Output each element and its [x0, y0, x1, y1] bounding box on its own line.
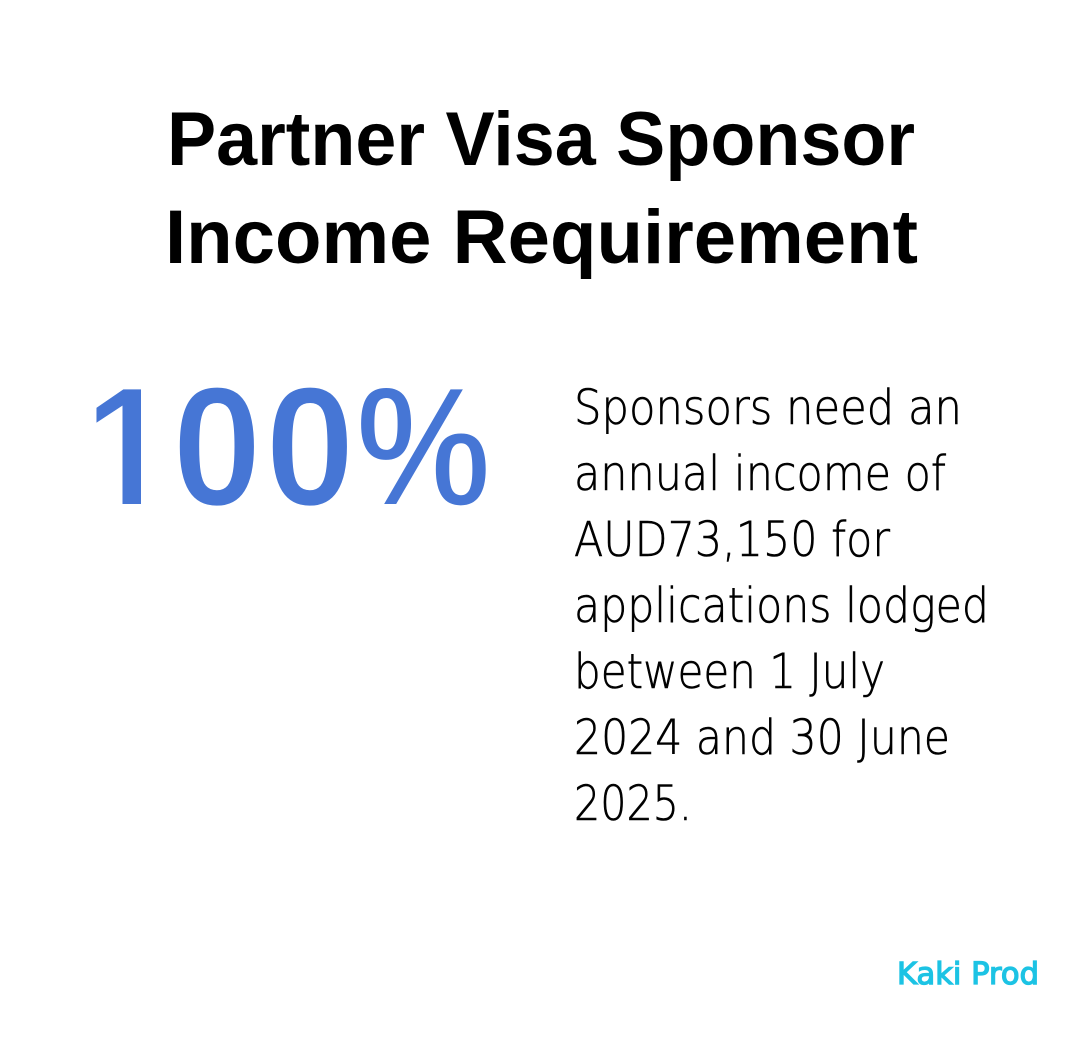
title: Income Requirement: [165, 195, 918, 280]
description text: applications lodged: [574, 578, 989, 634]
logo: Kaki Prod: Kaki Prod: [897, 957, 1039, 992]
title: Partner Visa Sponsor: [167, 97, 915, 182]
description text: 2025.: [574, 776, 692, 832]
big statistic: 100%: [84, 352, 491, 542]
big statistic: 100%: %: [356, 352, 491, 542]
description text: between 1 July: [574, 644, 885, 700]
description text: [574, 380, 989, 832]
description text: Sponsors need an: [574, 380, 962, 436]
description text: annual income of: [574, 446, 946, 502]
big statistic: 100%: 0: [172, 352, 262, 542]
big statistic: 100%: 1: [84, 352, 174, 542]
big statistic: 100%: 0: [265, 352, 355, 542]
description text: AUD73,150 for: [574, 512, 890, 568]
description text: 2024 and 30 June: [574, 710, 950, 766]
title: [165, 97, 918, 280]
